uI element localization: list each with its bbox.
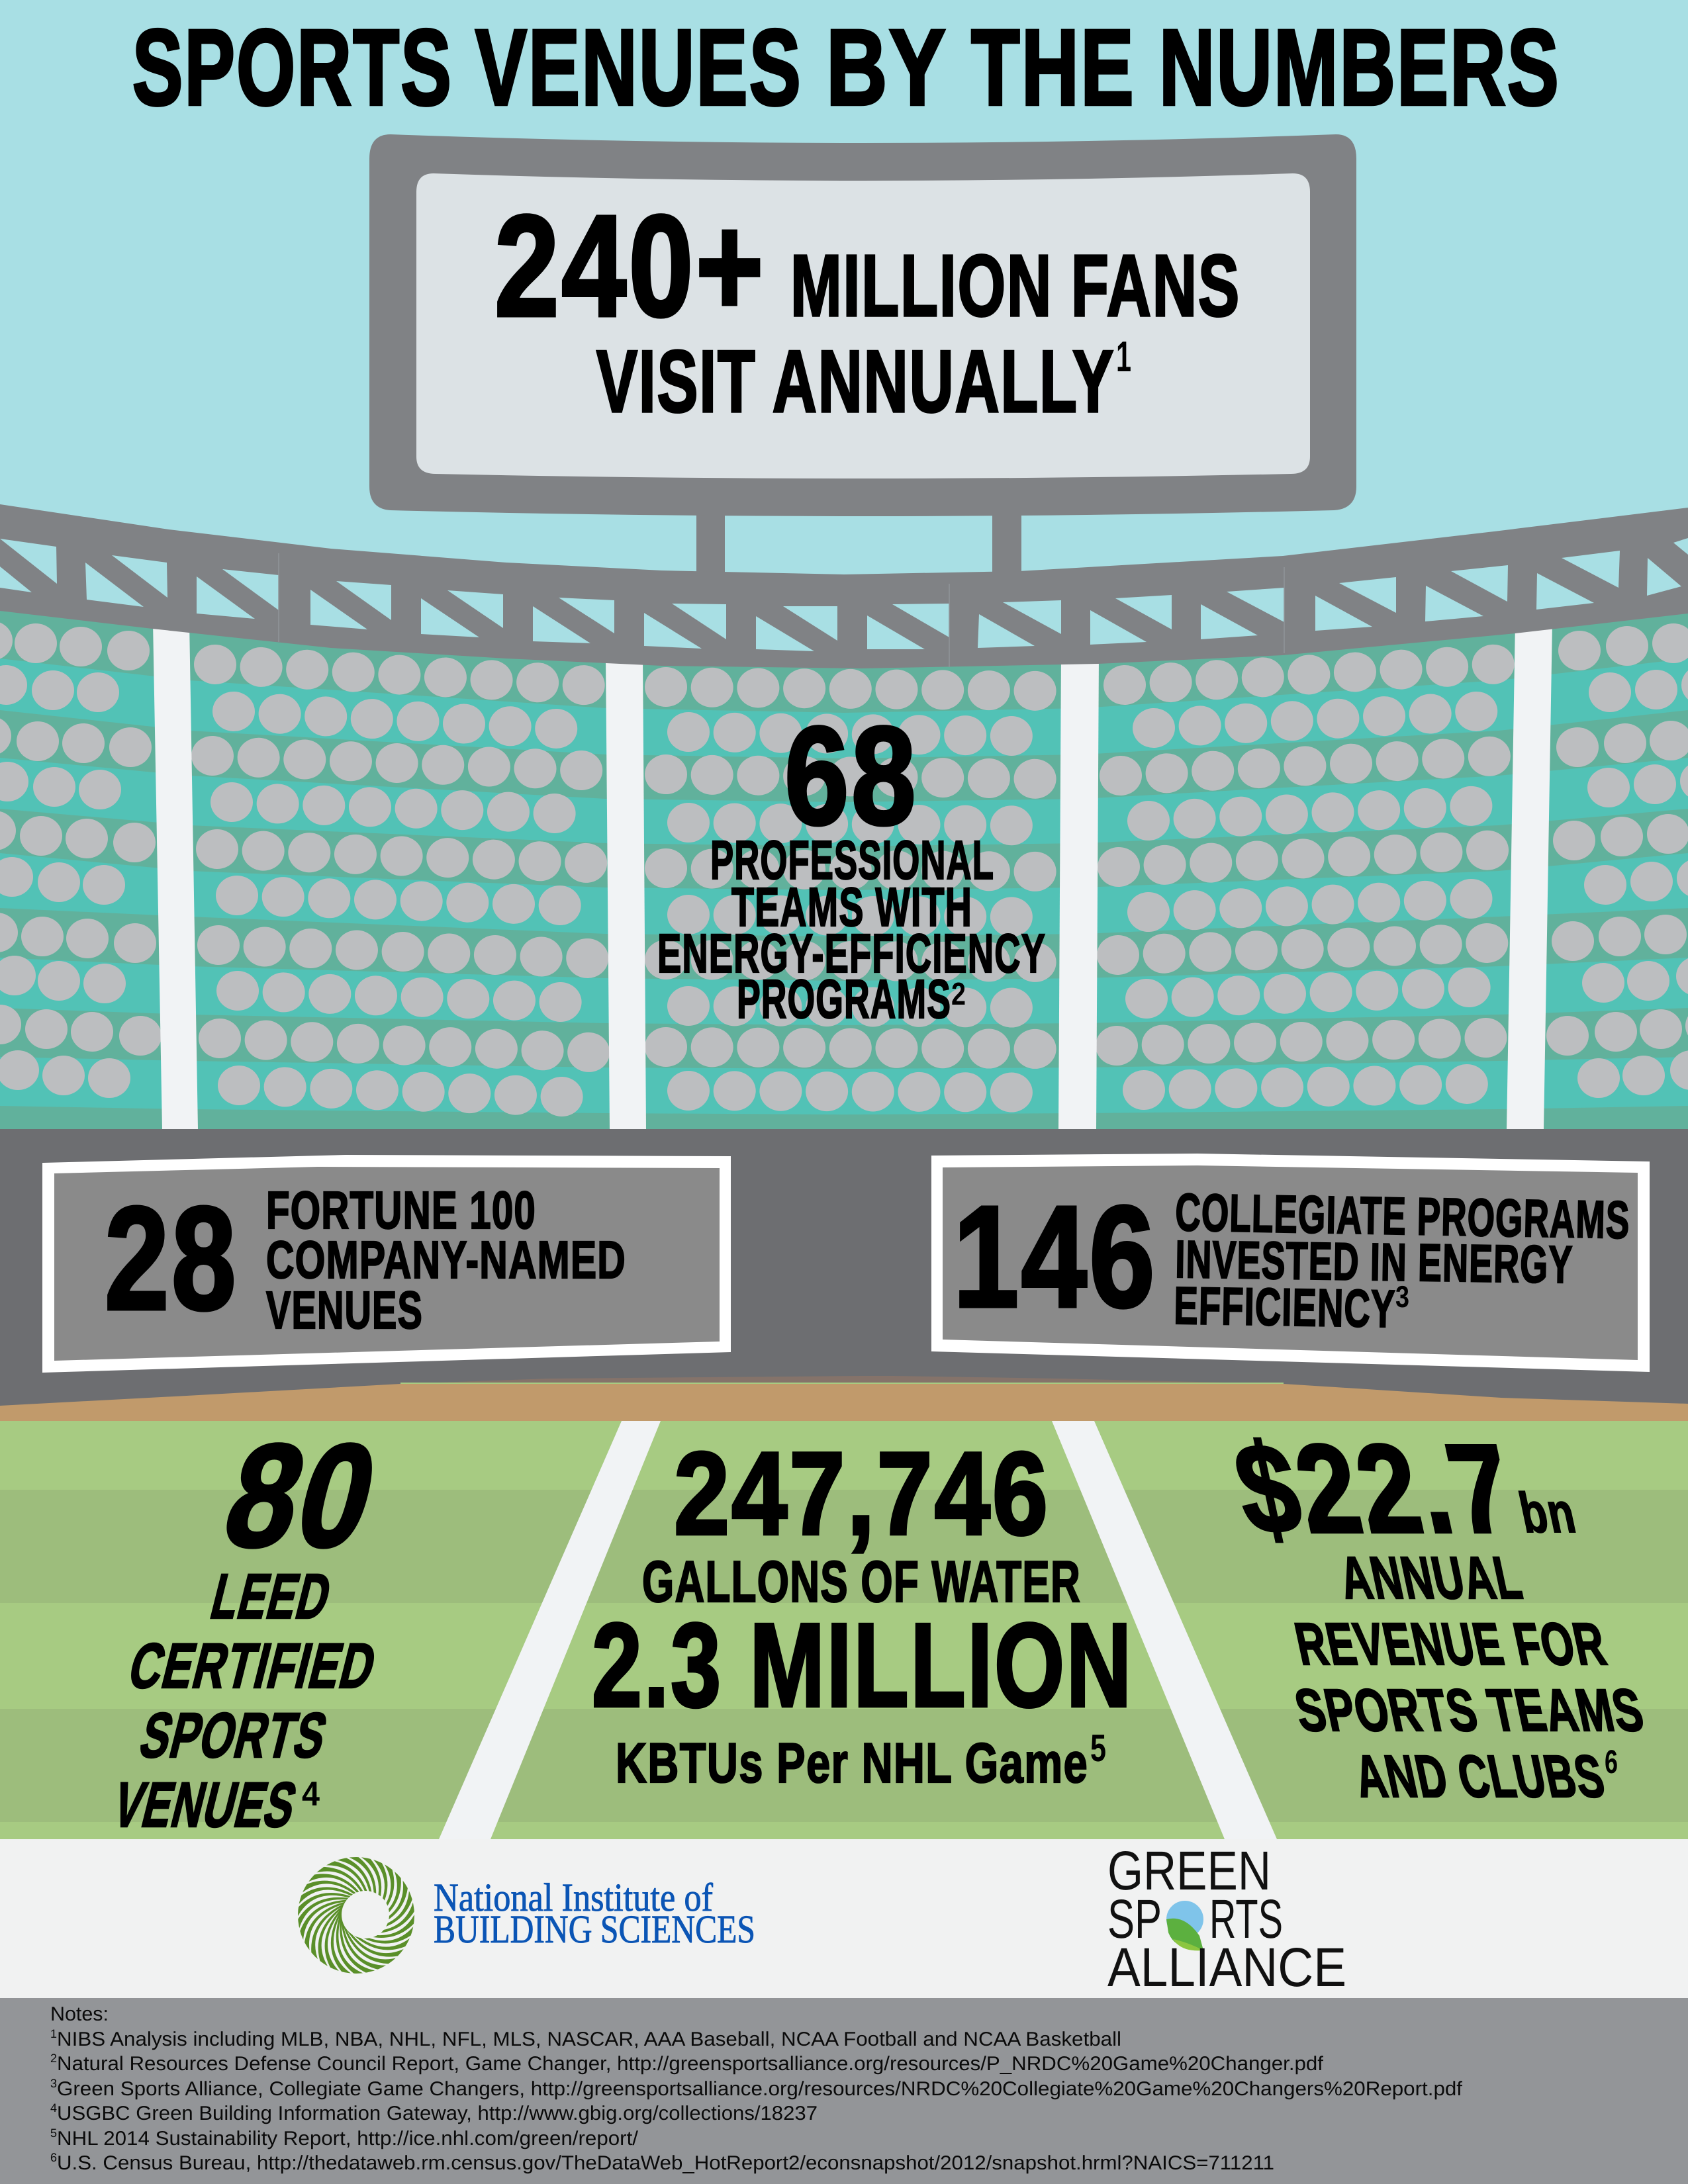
truss band <box>0 504 1688 668</box>
text: annual: ANNUAL <box>1334 1545 1528 1612</box>
grass <box>0 1421 1688 1839</box>
text: sports: SPORTS <box>134 1700 334 1771</box>
note 3: 3 <box>50 2077 57 2090</box>
outfield wall <box>0 1129 1688 1424</box>
seating base <box>0 596 1688 1129</box>
panel: notes <box>0 1998 1688 2184</box>
note 6: 6 <box>50 2151 57 2164</box>
panel: logos band <box>0 1839 1688 1999</box>
text: million fans: MILLION FANS <box>790 237 1241 334</box>
footnote mark 4: 4 <box>302 1775 320 1813</box>
text: green: GREEN <box>1107 1840 1271 1901</box>
note 5: NHL 2014 Sustainability Report, http://ice.nhl.com/green/report/ <box>57 2128 639 2150</box>
stat block: annual revenue <box>1224 1419 1650 1810</box>
footnote mark 3: 3 <box>1395 1279 1409 1314</box>
text: bn: bn <box>1514 1482 1581 1545</box>
stat: 146: 146 <box>953 1177 1157 1338</box>
title: VENUES <box>475 7 802 128</box>
text: gallons of water: GALLONS OF WATER <box>642 1549 1081 1614</box>
note 4: 4 <box>50 2101 57 2115</box>
white pillars <box>153 622 1552 1129</box>
footnote mark 1: 1 <box>1116 332 1131 381</box>
sky background <box>0 0 1688 728</box>
panel: scoreboard <box>369 134 1356 582</box>
stat block: nhl game water and energy <box>592 1428 1133 1795</box>
title: SPORTS <box>132 7 453 128</box>
stat: 28: 28 <box>105 1177 238 1341</box>
sign frame <box>42 1155 731 1373</box>
seats: left section <box>191 643 610 1117</box>
text: programs: PROGRAMS <box>737 968 951 1030</box>
text: efficiency: EFFICIENCY <box>1174 1276 1396 1338</box>
text: professional: PROFESSIONAL <box>710 829 994 891</box>
seats: right section <box>1095 643 1515 1111</box>
text: fortune 100: FORTUNE 100 <box>266 1181 536 1240</box>
logo: green sports alliance <box>1107 1840 1346 1998</box>
text: building sciences: BUILDING SCIENCES <box>434 1907 755 1951</box>
infield dirt <box>0 1376 1688 1422</box>
text: leed: LEED <box>205 1561 338 1632</box>
sign frame <box>931 1154 1650 1372</box>
text: energy-efficiency: ENERGY-EFFICIENCY <box>657 923 1046 984</box>
stat: 247,746: 247,746 <box>674 1428 1050 1559</box>
seats: center section <box>645 667 1056 1113</box>
stat block: professional teams <box>657 698 1046 1030</box>
text: teams with: TEAMS WITH <box>731 876 972 938</box>
sign face <box>943 1165 1638 1360</box>
stat: 68: 68 <box>784 698 918 854</box>
note 2: Natural Resources Defense Council Report, Game Changer, http://greensportsalliance.org/resources/P_NRDC%20Game%20Changer.pdf <box>57 2053 1324 2075</box>
text: kbtus per nhl game: KBTUs Per NHL Game <box>616 1732 1088 1795</box>
icon: ball and leaf <box>1166 1901 1203 1950</box>
left foul line <box>439 1421 661 1839</box>
seats: far left section <box>0 621 162 1098</box>
stat: 80: 80 <box>211 1414 395 1577</box>
truss openings <box>0 538 1688 651</box>
notes heading: Notes: <box>50 2003 109 2025</box>
text: alliance: ALLIANCE <box>1107 1936 1346 1998</box>
title: BY <box>826 7 947 128</box>
scoreboard screen <box>416 173 1310 478</box>
text: visit annually: VISIT ANNUALLY <box>596 333 1115 431</box>
notes background <box>0 1998 1688 2184</box>
footnote mark 2: 2 <box>951 977 966 1012</box>
text: national institute of: National Institute of <box>434 1876 713 1919</box>
note 6: U.S. Census Bureau, http://thedataweb.rm.census.gov/TheDataWeb_HotReport2/econsnapshot/2012/snapshot.hrml?NAICS=711211 <box>57 2152 1274 2174</box>
panel: roof truss <box>0 504 1688 668</box>
text: rts: RTS <box>1209 1888 1283 1950</box>
text: company-named: COMPANY-NAMED <box>266 1230 626 1289</box>
scoreboard frame <box>369 134 1356 516</box>
note 2: 2 <box>50 2052 57 2065</box>
text: venues: VENUES <box>266 1281 423 1340</box>
note 1: 1 <box>50 2027 57 2040</box>
sign face <box>54 1167 720 1361</box>
text: venues: VENUES <box>107 1770 304 1841</box>
title <box>132 7 1560 128</box>
text: certified: CERTIFIED <box>122 1631 383 1702</box>
note 4: USGBC Green Building Information Gateway, http://www.gbig.org/collections/18237 <box>57 2103 818 2124</box>
stat: $22.7: $22.7 <box>1224 1419 1526 1559</box>
panel: collegiate programs sign <box>931 1154 1650 1372</box>
right foul line <box>1052 1421 1277 1839</box>
stat: 2.3 million: 2.3 MILLION <box>592 1599 1133 1732</box>
scoreboard posts <box>696 510 1021 582</box>
note 1: NIBS Analysis including MLB, NBA, NHL, NFL, MLS, NASCAR, AAA Baseball, NCAA Football and NCAA Basketball <box>57 2028 1121 2050</box>
text: sp: SP <box>1107 1888 1162 1950</box>
footnote mark 5: 5 <box>1090 1727 1106 1770</box>
note 3: Green Sports Alliance, Collegiate Game Changers, http://greensportsalliance.org/resources/NRDC%20Collegiate%20Game%20Changers%20Report.pdf <box>57 2078 1463 2100</box>
grass stripes <box>0 1490 1688 1822</box>
stat block: leed certified venues <box>107 1414 395 1841</box>
footnote mark 6: 6 <box>1605 1743 1618 1780</box>
title: THE <box>971 7 1135 128</box>
panel: stadium seating <box>0 596 1688 1129</box>
panel: fortune 100 sign <box>42 1155 731 1373</box>
seats: far right section <box>1546 623 1688 1098</box>
panel: playing field <box>0 1421 1688 1839</box>
seating row bands <box>0 596 1688 1129</box>
note 5: 5 <box>50 2126 57 2140</box>
stat: 240+: 240+ <box>494 186 766 347</box>
icon: green swirl <box>291 1850 421 1980</box>
logo: national institute of building sciences <box>291 1850 755 1980</box>
